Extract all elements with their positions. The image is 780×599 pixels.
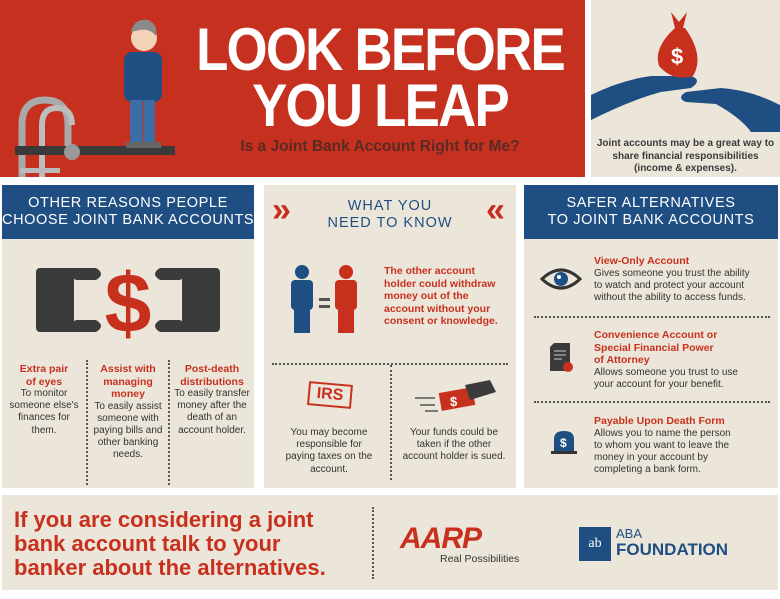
columns: Assist with managing money [100, 363, 156, 400]
call to action text: banker about the alternatives. [14, 555, 326, 580]
call to action text [14, 507, 326, 580]
icon: two equal people [291, 265, 357, 333]
icon: document [550, 343, 573, 372]
icon: IRS stamp: IRS [316, 385, 344, 404]
logo: ABA Foundation: ABA [616, 526, 642, 541]
columns: Post-death distributions [180, 363, 244, 388]
heading with chevrons: « [486, 191, 505, 229]
heading [2, 185, 254, 239]
heading with chevrons [272, 191, 505, 231]
intro text: Joint accounts may be a great way to share financial responsibilities (income & expenses). [597, 138, 774, 174]
item: view-only: Gives someone you trust the ability to watch and protect your account without the ability to access funds. [594, 268, 750, 303]
heading: OTHER REASONS PEOPLE [28, 195, 228, 211]
call to action text: If you are considering a joint [14, 507, 314, 532]
logo: ABA Foundation: FOUNDATION [616, 540, 728, 559]
icon: tombstone: $ [560, 436, 567, 450]
icon: hands with money bag: $ [671, 44, 683, 69]
heading: TO JOINT BANK ACCOUNTS [548, 212, 754, 228]
icon: tombstone [551, 431, 577, 454]
item: payable on death: Allows you to name the person to whom you want to leave the money in your account by completing a bank form. [594, 428, 731, 475]
logo: ABA Foundation [579, 526, 728, 561]
panel: footer call to action [2, 495, 778, 590]
subtitle: Is a Joint Bank Account Right for Me? [240, 138, 520, 155]
title text: LOOK BEFORE [196, 16, 564, 83]
icon: eye [540, 268, 582, 290]
panel: joint accounts intro [591, 0, 780, 177]
panel: title banner [0, 0, 585, 177]
icon: diving board and pool ladder [15, 20, 175, 177]
item: convenience: Convenience Account or Special Financial Power of Attorney [594, 329, 717, 366]
logo: ABA Foundation: ab [588, 536, 602, 551]
logo: AARP [399, 522, 519, 565]
text: sued: Your funds could be taken if the other account holder is sued. [403, 427, 505, 462]
columns: To easily assist someone with paying bills and other banking needs. [94, 400, 162, 460]
icon: hands with dollar sign [36, 260, 220, 342]
icon: money flying: $ [450, 394, 458, 409]
logo: AARP: AARP [400, 522, 481, 555]
panel: safer alternatives [524, 185, 778, 488]
panel: other reasons [2, 185, 254, 488]
heading with chevrons: » [272, 191, 291, 229]
heading with chevrons: NEED TO KNOW [327, 215, 453, 231]
heading: SAFER ALTERNATIVES [566, 195, 736, 211]
heading: CHOOSE JOINT BANK ACCOUNTS [2, 212, 254, 228]
columns: To monitor someone else's finances for them. [9, 388, 79, 436]
columns: Extra pair [20, 363, 68, 375]
item: view-only: View-Only Account [594, 255, 689, 267]
item: payable on death: Payable Upon Death Form [594, 415, 725, 427]
item: convenience: Allows someone you trust to use your account for your benefit. [594, 366, 738, 390]
columns: of eyes [26, 376, 62, 388]
warning text: The other account holder could withdraw money out of the account without your consent or knowledge. [384, 265, 498, 327]
icon: money flying [415, 380, 496, 412]
panel: what you need to know [264, 185, 516, 488]
heading [524, 185, 778, 239]
icon: IRS stamp [307, 381, 353, 409]
columns [9, 360, 250, 485]
columns: To easily transfer money after the death of an account holder. [174, 388, 250, 436]
title text: YOU LEAP [252, 72, 508, 139]
logo: AARP: Real Possibilities [440, 553, 519, 565]
call to action text: bank account talk to your [14, 531, 280, 556]
heading with chevrons: WHAT YOU [348, 198, 432, 214]
text: taxes: You may become responsible for paying taxes on the account. [286, 427, 372, 475]
item: convenience [594, 329, 738, 390]
icon: hands with money bag [591, 12, 780, 132]
title text [196, 16, 564, 139]
